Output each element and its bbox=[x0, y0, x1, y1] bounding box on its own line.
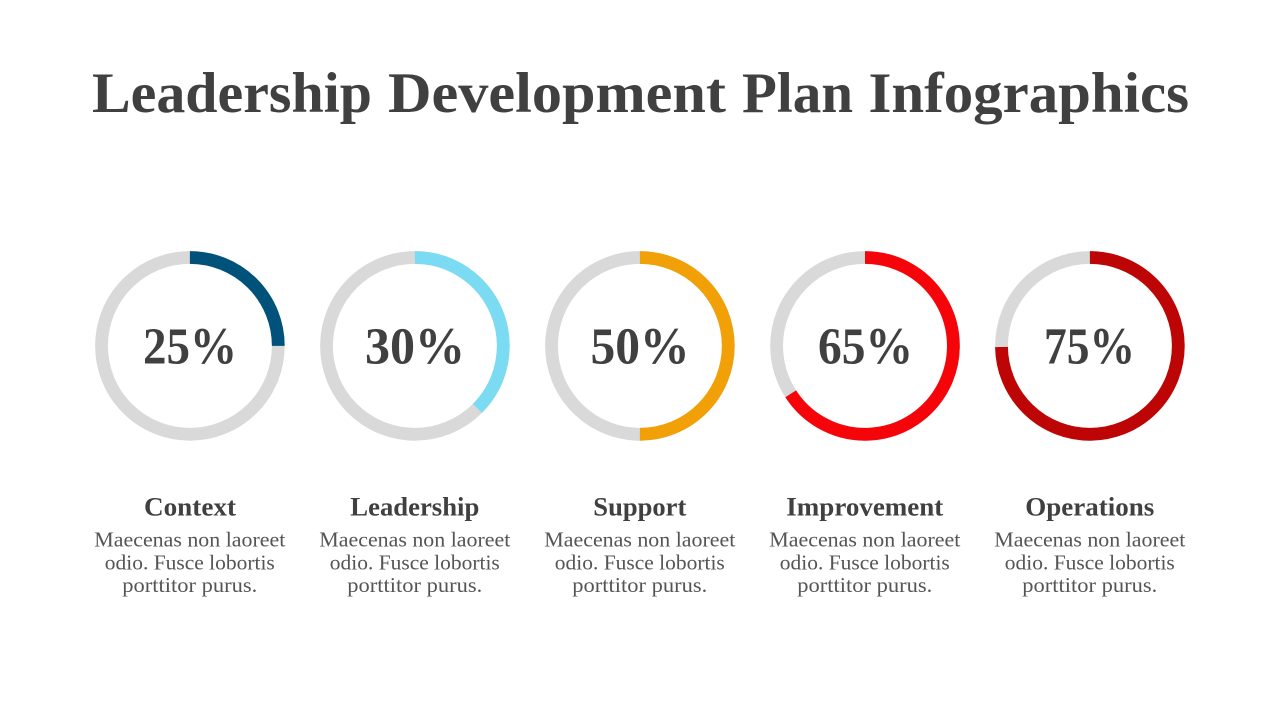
title bbox=[92, 62, 1189, 125]
text block: Operations: Maecenas non laoreet bbox=[994, 528, 1185, 552]
text block: Context: odio. Fusce lobortis bbox=[105, 550, 275, 574]
text block: Context: Maecenas non laoreet bbox=[94, 528, 285, 552]
donut: 25% bbox=[101, 258, 278, 434]
text block: Leadership: porttitor purus. bbox=[347, 573, 482, 597]
title: Development bbox=[388, 62, 726, 125]
donut: 75% bbox=[1002, 258, 1178, 434]
text block: Improvement: Maecenas non laoreet bbox=[769, 528, 960, 552]
text block: Operations: Operations bbox=[1025, 492, 1154, 522]
title: Infographics bbox=[868, 62, 1189, 125]
text block: Leadership: Leadership bbox=[350, 492, 479, 522]
text block: Leadership: odio. Fusce lobortis bbox=[330, 550, 500, 574]
text block: Improvement bbox=[769, 492, 960, 597]
donut: 75%: 75% bbox=[1044, 318, 1135, 376]
text block: Support: Maecenas non laoreet bbox=[544, 528, 735, 552]
text block: Support: Support bbox=[593, 492, 687, 522]
text block: Support: porttitor purus. bbox=[572, 573, 707, 597]
donut: 65%: 65% bbox=[818, 318, 913, 376]
text block: Leadership: Maecenas non laoreet bbox=[319, 528, 510, 552]
donut: 30%: 30% bbox=[365, 318, 465, 376]
text block: Operations: odio. Fusce lobortis bbox=[1005, 550, 1175, 574]
text block: Operations bbox=[994, 492, 1185, 597]
text block: Support bbox=[544, 492, 735, 597]
text block: Operations: porttitor purus. bbox=[1022, 573, 1157, 597]
text block: Context: porttitor purus. bbox=[122, 573, 257, 597]
donut: 30% bbox=[326, 258, 503, 434]
donut: 50%: 50% bbox=[590, 318, 690, 376]
donut: 25%: 25% bbox=[143, 318, 237, 376]
text block: Improvement: porttitor purus. bbox=[797, 573, 932, 597]
title: Plan bbox=[742, 62, 853, 125]
donut: 65% bbox=[777, 258, 953, 434]
text block: Context bbox=[94, 492, 285, 597]
text block: Improvement: odio. Fusce lobortis bbox=[780, 550, 950, 574]
text block: Support: odio. Fusce lobortis bbox=[555, 550, 725, 574]
text block: Improvement: Improvement bbox=[786, 492, 944, 522]
donut: 50% bbox=[552, 258, 728, 434]
text block: Leadership bbox=[319, 492, 510, 597]
text block: Context: Context bbox=[144, 492, 236, 522]
title: Leadership bbox=[92, 62, 372, 125]
